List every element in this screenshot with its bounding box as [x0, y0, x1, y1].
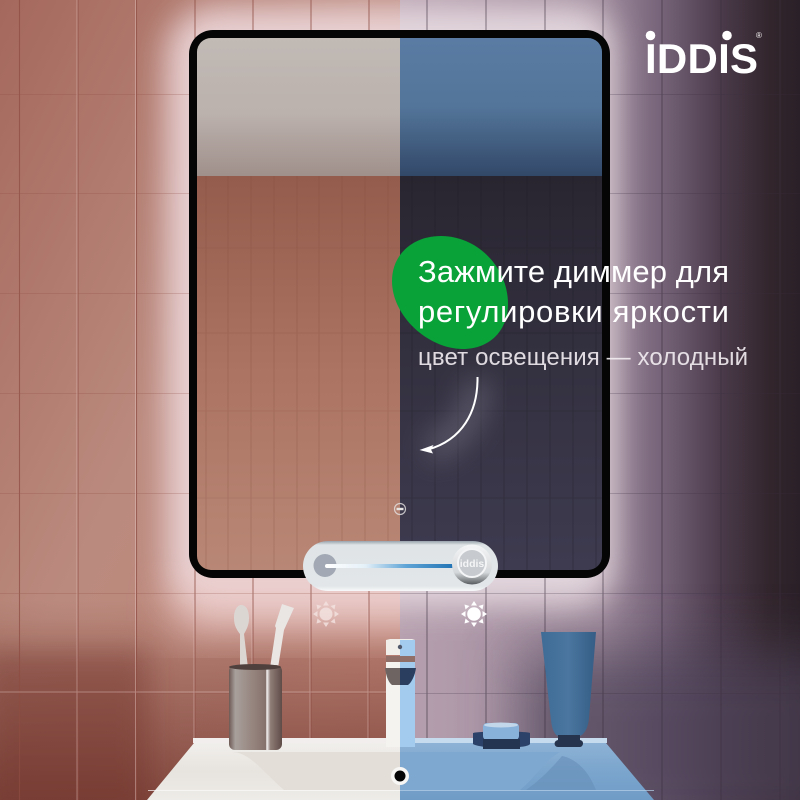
mirror reflection: warm ceiling — [197, 38, 400, 176]
logo: iddis: IDDIS — [645, 35, 758, 82]
dimmer knob: iddis — [460, 558, 484, 570]
mirror back glow — [144, 0, 400, 658]
callout: green blob — [392, 236, 508, 349]
soap dish — [473, 722, 530, 749]
registered mark: ® — [756, 31, 762, 40]
tube — [541, 632, 596, 747]
icon: bright sun — [461, 601, 487, 627]
dimmer track — [325, 564, 460, 568]
icon: dim sun — [313, 601, 339, 627]
dimmer start dot — [314, 554, 336, 577]
heading: Зажмите диммер для — [418, 254, 729, 289]
sink warm half — [147, 743, 400, 800]
sink — [147, 738, 654, 800]
panel: mirror — [189, 30, 610, 578]
faucet — [385, 639, 416, 747]
sink cool half — [400, 743, 654, 800]
mirror touch sensor icon — [394, 504, 406, 514]
heading — [418, 254, 729, 329]
dimmer control — [303, 541, 498, 591]
toothbrush cup — [229, 664, 282, 750]
dimmer knob — [452, 544, 492, 584]
heading: регулировки яркости — [418, 294, 729, 329]
toothbrushes — [234, 604, 294, 668]
sink drain — [391, 767, 409, 785]
subheading: light colour: цвет освещения — холодный — [418, 344, 748, 371]
arrow — [420, 377, 478, 454]
mirror reflection: warm wall — [197, 176, 400, 571]
mirror reflection: cool wall — [400, 176, 602, 571]
mirror reflection: cool ceiling — [400, 38, 602, 176]
